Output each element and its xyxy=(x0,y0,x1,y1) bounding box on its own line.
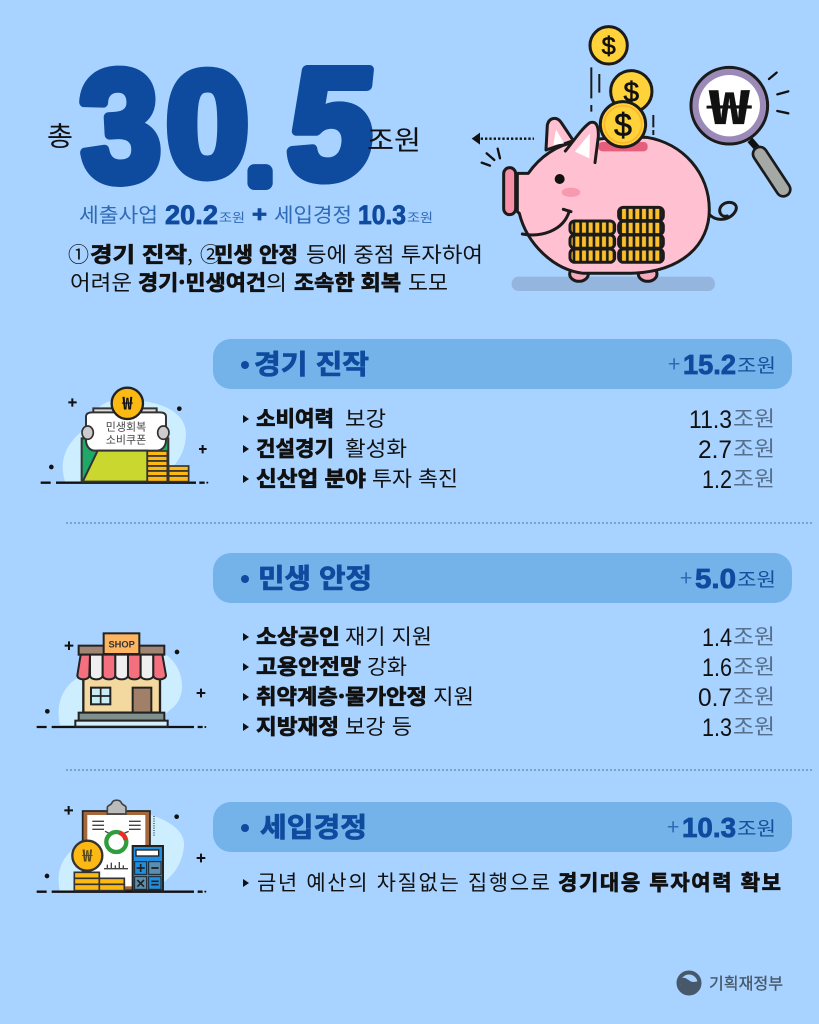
section header band: 5.0 xyxy=(695,563,736,594)
icon: clipboard calculator xyxy=(37,800,206,893)
list items: 조원 xyxy=(733,433,775,463)
intro text: 조속한 회복 xyxy=(294,267,401,297)
section header band: + xyxy=(668,347,680,379)
pig back ear xyxy=(546,118,573,150)
snout ticks xyxy=(482,149,500,166)
list items: 0.7 xyxy=(698,684,732,712)
section header band xyxy=(213,553,792,603)
list items: 투자 촉진 xyxy=(372,463,458,493)
list items: 1.2 xyxy=(702,466,732,494)
pig snout xyxy=(504,168,516,215)
headline: total 30.5 trillion won xyxy=(47,36,421,216)
list items: 1.6 xyxy=(702,654,732,682)
list items: 조원 xyxy=(733,711,775,741)
coin slot xyxy=(598,142,648,151)
list items: 보강 등 xyxy=(345,711,412,741)
list item: 경기대응 투자여력 확보 xyxy=(558,867,781,897)
icon: consumption coupon envelope: 소비쿠폰 xyxy=(106,431,146,447)
list items: 지방재정 xyxy=(256,711,339,741)
section header band xyxy=(213,802,792,852)
intro text: ① xyxy=(68,239,89,269)
icon: consumption coupon envelope: 민생회복 xyxy=(106,419,146,435)
intro text: 민생 안정 xyxy=(214,239,298,269)
subtitle: budget breakdown: 20.2 xyxy=(165,200,218,230)
section header band: 민생 안정 xyxy=(258,557,372,596)
section header band: 조원 xyxy=(737,351,776,378)
subtitle: budget breakdown: 세입경정 xyxy=(274,199,352,228)
list item xyxy=(243,867,781,897)
pig body xyxy=(517,137,709,273)
list items: 고용안전망 xyxy=(256,651,361,681)
list items: 2.7 xyxy=(698,436,732,464)
list items: 재기 지원 xyxy=(345,621,432,651)
section header band: + xyxy=(680,561,692,593)
panel: 경기 진작 xyxy=(213,339,792,494)
headline: total 30.5 trillion won: 총 xyxy=(47,115,73,154)
intro text: 경기·민생여건 xyxy=(138,267,266,297)
list items: 소비여력 xyxy=(256,403,334,433)
headline: total 30.5 trillion won: . xyxy=(249,111,271,200)
falling coin middle xyxy=(611,71,652,112)
subtitle: budget breakdown: 조원 xyxy=(219,207,245,226)
intro text xyxy=(68,239,483,297)
headline: total 30.5 trillion won: 3 xyxy=(76,37,165,216)
section header band: 10.3 xyxy=(682,812,736,843)
intro text: , xyxy=(187,239,193,269)
magnifier with won sign xyxy=(691,67,788,189)
icon: shop: SHOP xyxy=(108,639,135,649)
intro text: 경기 진작 xyxy=(90,239,187,269)
list items xyxy=(243,621,775,742)
falling coin top: $ xyxy=(602,32,616,60)
subtitle: budget breakdown: + xyxy=(252,202,267,227)
falling coin front xyxy=(600,102,646,147)
list item: 금년 예산의 차질없는 집행으로 xyxy=(257,867,550,897)
arrow xyxy=(472,133,534,145)
list items: 보강 xyxy=(345,403,386,433)
falling coin top xyxy=(590,27,627,64)
intro text: 의 xyxy=(266,267,287,297)
pig smile xyxy=(522,209,571,235)
list items: 조원 xyxy=(733,651,775,681)
list items: 건설경기 xyxy=(256,433,334,463)
icon: shop xyxy=(37,633,206,728)
list items: 11.3 xyxy=(689,406,732,434)
logo: ministry of economy and finance: 기획재정부 xyxy=(709,970,783,994)
list items: 조원 xyxy=(733,681,775,711)
pig eye xyxy=(555,174,565,184)
intro text: 등에 중점 투자하여 xyxy=(306,239,483,269)
subtitle: budget breakdown: 세출사업 xyxy=(79,199,158,228)
icon: clipboard calculator: ₩ xyxy=(81,842,93,866)
pig feet xyxy=(570,267,657,281)
intro text: ② xyxy=(200,239,221,269)
falling coin middle: $ xyxy=(624,77,640,108)
list items: 지원 xyxy=(433,681,474,711)
motion lines xyxy=(591,67,653,135)
section header band: 조원 xyxy=(737,814,776,841)
list items: 조원 xyxy=(733,403,775,433)
panel: 민생 안정 xyxy=(213,553,792,742)
list items: 소상공인 xyxy=(256,621,340,651)
headline: total 30.5 trillion won: 0 xyxy=(166,42,249,207)
section header band: 조원 xyxy=(737,565,776,592)
magnifier with won sign: ₩ xyxy=(707,71,753,138)
icon: consumption coupon envelope: ₩ xyxy=(121,389,133,414)
list items: 1.3 xyxy=(702,714,732,742)
headline: total 30.5 trillion won: 5 xyxy=(280,36,383,212)
subtitle: budget breakdown: 10.3 xyxy=(358,200,406,230)
divider dots xyxy=(66,769,813,771)
list items: 활성화 xyxy=(345,433,407,463)
list items: 조원 xyxy=(733,463,775,493)
section header band: 세입경정 xyxy=(260,806,367,845)
pig blush xyxy=(562,188,580,197)
intro text: 도모 xyxy=(408,267,448,297)
section header band: + xyxy=(667,810,679,842)
coin stacks in pig xyxy=(570,207,663,262)
pig tail xyxy=(708,202,736,219)
section header band: 경기 진작 xyxy=(254,343,369,382)
list items xyxy=(243,403,775,494)
list items: 신산업 분야 xyxy=(256,463,366,493)
intro text: 어려운 xyxy=(70,267,132,297)
list items: 조원 xyxy=(733,621,775,651)
falling coin front: $ xyxy=(614,107,632,143)
icon: consumption coupon envelope xyxy=(41,388,208,484)
divider dots xyxy=(66,522,813,524)
pig front ear xyxy=(565,122,598,163)
subtitle: budget breakdown: 조원 xyxy=(407,207,433,226)
section header band xyxy=(213,339,792,389)
panel: 세입경정 xyxy=(213,802,792,897)
list items: 취약계층·물가안정 xyxy=(256,681,427,711)
section header band: 15.2 xyxy=(683,349,736,380)
list items: 1.4 xyxy=(702,624,732,652)
illustration: piggy bank with coins and magnifier xyxy=(472,27,788,291)
pig shadow xyxy=(512,277,715,291)
subtitle: budget breakdown xyxy=(79,199,433,230)
list items: 강화 xyxy=(367,651,407,681)
headline: total 30.5 trillion won: 조원 xyxy=(367,119,421,158)
